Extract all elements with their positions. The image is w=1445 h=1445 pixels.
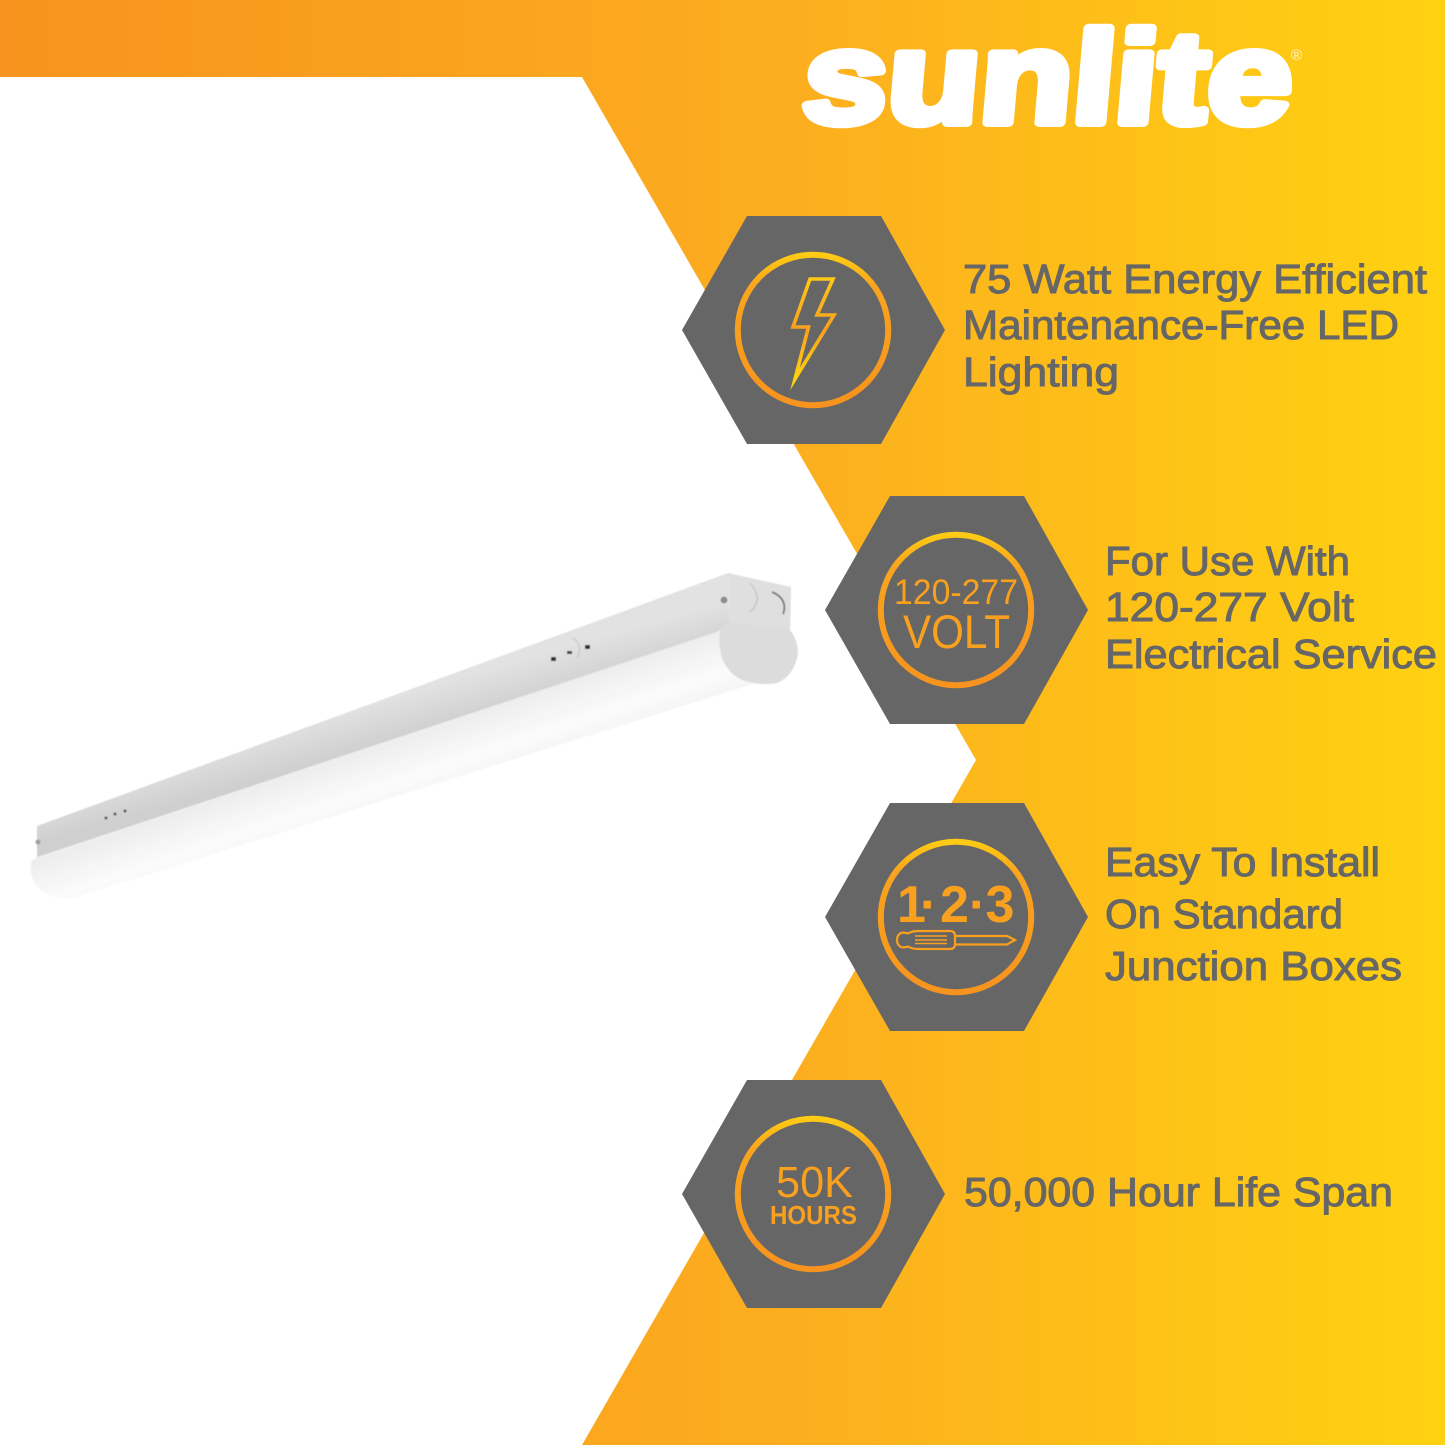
hexagon badge with 1-2-3 and screwdriver: 2 — [940, 876, 969, 934]
hexagon badge with 1-2-3 and screwdriver: · — [969, 876, 986, 934]
hexagon badge with 50K hours — [682, 1080, 945, 1308]
hexagon badge with 50K hours: 50K — [776, 1158, 853, 1207]
product image: LED strip fixture — [31, 573, 798, 898]
text: for use with: Electrical Service — [1105, 631, 1437, 677]
text: for use with — [1105, 538, 1437, 677]
feature 3: easy install — [825, 803, 1402, 1031]
text: easy to install — [1105, 839, 1402, 989]
hexagon badge with 50K hours: HOURS — [770, 1200, 857, 1230]
fixture side channel — [37, 573, 730, 858]
logo: Sunlite: sunlite — [798, 5, 1299, 150]
text: easy to install: Easy To Install — [1105, 839, 1380, 885]
text: 50,000 hour: 50,000 Hour Life Span — [964, 1169, 1393, 1215]
hexagon badge with 1-2-3 and screwdriver: 1 — [897, 876, 926, 934]
hexagon badge with lightning icon — [682, 216, 945, 444]
white chevron panel — [0, 77, 976, 1445]
mounting screw and vents — [36, 597, 727, 844]
hexagon badge with 1-2-3 and screwdriver — [825, 803, 1088, 1031]
text: easy to install: On Standard — [1105, 891, 1343, 937]
feature 4: life span — [682, 1080, 1393, 1308]
text: 75 Watt — [963, 256, 1428, 395]
text: for use with: For Use With — [1105, 538, 1350, 584]
feature 2: voltage — [825, 496, 1437, 724]
hexagon badge with 1-2-3 and screwdriver: · — [920, 876, 937, 934]
end plate with knockouts — [719, 573, 798, 684]
hexagon badge with 1-2-3 and screwdriver: 3 — [986, 876, 1014, 934]
feature 1: energy efficient — [682, 216, 1428, 444]
text: 75 Watt: Maintenance-Free LED — [963, 302, 1399, 348]
text: easy to install: Junction Boxes — [1105, 943, 1402, 989]
text: 75 Watt: Lighting — [963, 349, 1119, 395]
hexagon badge with voltage label: 120-277 — [894, 573, 1018, 612]
fixture lens — [31, 631, 772, 898]
hexagon badge with voltage label: VOLT — [903, 605, 1010, 658]
hexagon badge with voltage label — [825, 496, 1088, 724]
logo: Sunlite: ® — [1291, 47, 1302, 64]
text: for use with: 120-277 Volt — [1105, 584, 1355, 630]
text: 75 Watt: 75 Watt Energy Efficient — [963, 256, 1428, 302]
